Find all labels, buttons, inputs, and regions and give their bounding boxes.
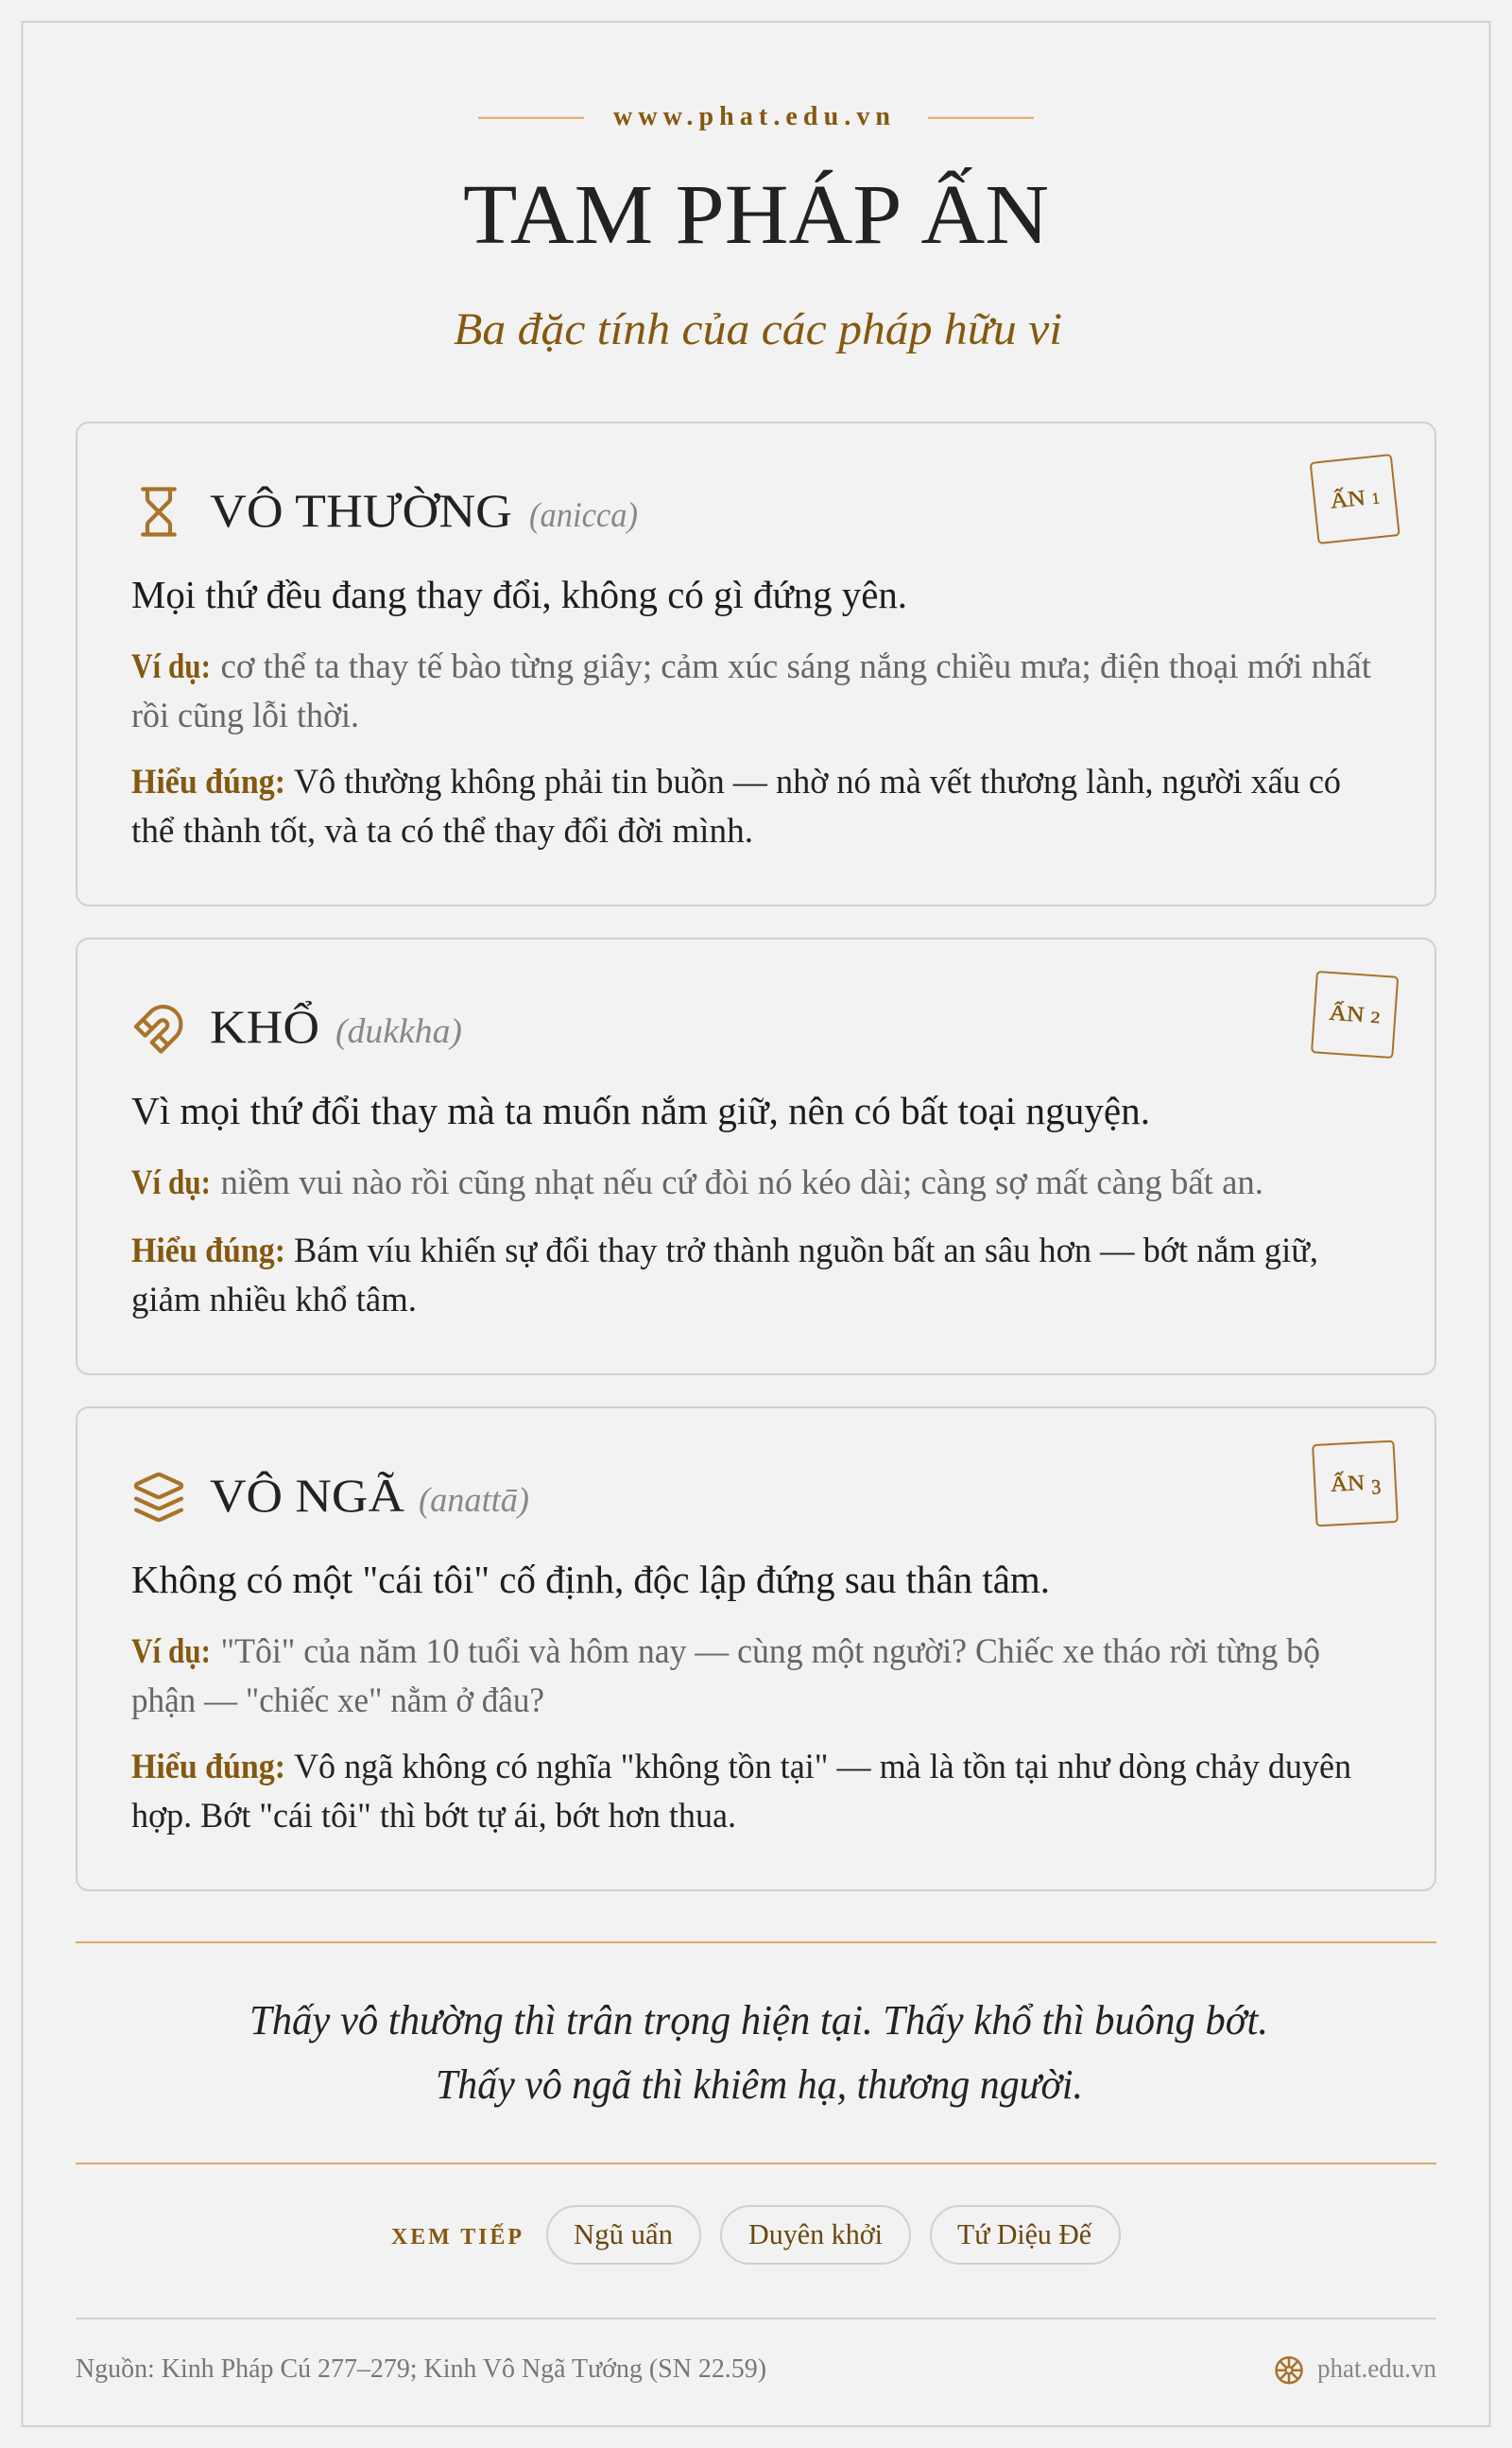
example: cơ thể ta thay tế bào từng giây; cảm xúc sáng nắng chiều mưa; điện thoại mới nhất [221,647,1372,686]
pali term: (anattā) [419,1481,529,1520]
stamp: ấn 3 [1313,1441,1398,1526]
closing quote: Thấy vô thường thì trân trọng hiện tại. Thấy khổ thì buông bớt. [249,1997,1268,2043]
icon: magnet [136,1007,180,1051]
definition: Mọi thứ đều đang thay đổi, không có gì đứng yên. [131,573,907,616]
example: Ví dụ: [131,647,211,686]
example: "Tôi" của năm 10 tuổi và hôm nay — cùng một người? Chiếc xe tháo rời từng bộ [221,1632,1320,1671]
stamp: ấn 1: 1 [1371,489,1381,508]
brand text: phat.edu.vn [1317,2354,1436,2384]
stamp: ấn 3: 3 [1371,1474,1382,1499]
pill: ngũ uẩn: Ngũ uẩn [574,2217,673,2250]
source note: Nguồn: Kinh Pháp Cú 277–279; Kinh Vô Ngã Tướng (SN 22.59) [76,2353,766,2384]
title: TAM PHÁP ẤN [463,166,1049,262]
see also links [391,2206,1120,2264]
correct understanding: giảm nhiều khổ tâm. [131,1281,417,1319]
example: rồi cũng lỗi thời. [131,697,359,735]
example [131,1632,1320,1720]
correct understanding: Vô ngã không có nghĩa "không tồn tại" — mà là tồn tại như dòng chảy duyên [294,1748,1351,1786]
icon: hourglass [143,490,175,535]
correct understanding: Hiểu đúng: [131,1232,285,1270]
website label: www.phat.edu.vn [613,102,890,131]
closing quote: Thấy vô ngã thì khiêm hạ, thương người. [436,2061,1083,2108]
panel: vô thường [77,422,1435,905]
example: niềm vui nào rồi cũng nhạt nếu cứ đòi nó kéo dài; càng sợ mất càng bất an. [221,1164,1263,1202]
footer brand [1276,2354,1436,2384]
stamp: ấn 2: ẤN [1329,1000,1366,1026]
heading: KHỔ [210,999,319,1053]
stamp: ấn 2 [1312,972,1398,1058]
correct understanding [131,1748,1351,1836]
definition: Vì mọi thứ đổi thay mà ta muốn nắm giữ, nên có bất toại nguyện. [131,1089,1150,1132]
subtitle: Ba đặc tính của các pháp hữu vi [454,304,1062,354]
heading: VÔ NGÃ [210,1469,404,1522]
pill: tứ diệu đế: Tứ Diệu Đế [957,2217,1092,2250]
example [131,647,1372,735]
pali term: (dukkha) [335,1012,462,1051]
closing quote [249,1997,1268,2108]
pill: ngũ uẩn [547,2206,700,2264]
correct understanding: hợp. Bớt "cái tôi" thì bớt tự ái, bớt hơn thua. [131,1797,736,1836]
correct understanding [131,1232,1318,1319]
stamp: ấn 3: ẤN [1330,1470,1366,1496]
icon: layers [136,1474,181,1520]
example: Ví dụ: [131,1632,211,1671]
heading: VÔ THƯỜNG [210,484,512,537]
pali term: (anicca) [529,496,638,535]
pill: duyên khởi [721,2206,910,2264]
stamp: ấn 1 [1311,455,1400,543]
example: Ví dụ: [131,1164,211,1202]
stamp: ấn 1: ẤN [1329,485,1366,513]
pill: duyên khởi: Duyên khởi [748,2217,883,2250]
example: phận — "chiếc xe" nằm ở đâu? [131,1681,544,1720]
panel: vô ngã [77,1407,1435,1890]
definition: Không có một "cái tôi" cố định, độc lập đứng sau thân tâm. [131,1558,1050,1601]
correct understanding: Hiểu đúng: [131,763,285,802]
correct understanding: Hiểu đúng: [131,1748,285,1786]
stamp: ấn 2: 2 [1370,1009,1381,1026]
correct understanding: Vô thường không phải tin buồn — nhờ nó mà vết thương lành, người xấu có [294,763,1341,802]
pill: tứ diệu đế [931,2206,1120,2264]
panel: khổ [77,939,1435,1374]
correct understanding [131,763,1341,851]
icon: dharma wheel [1276,2357,1302,2383]
correct understanding: Bám víu khiến sự đổi thay trở thành nguồn bất an sâu hơn — bớt nắm giữ, [294,1232,1318,1270]
header [454,102,1062,354]
correct understanding: thể thành tốt, và ta có thể thay đổi đời mình. [131,812,753,851]
see also label: XEM TIẾP [391,2224,522,2250]
